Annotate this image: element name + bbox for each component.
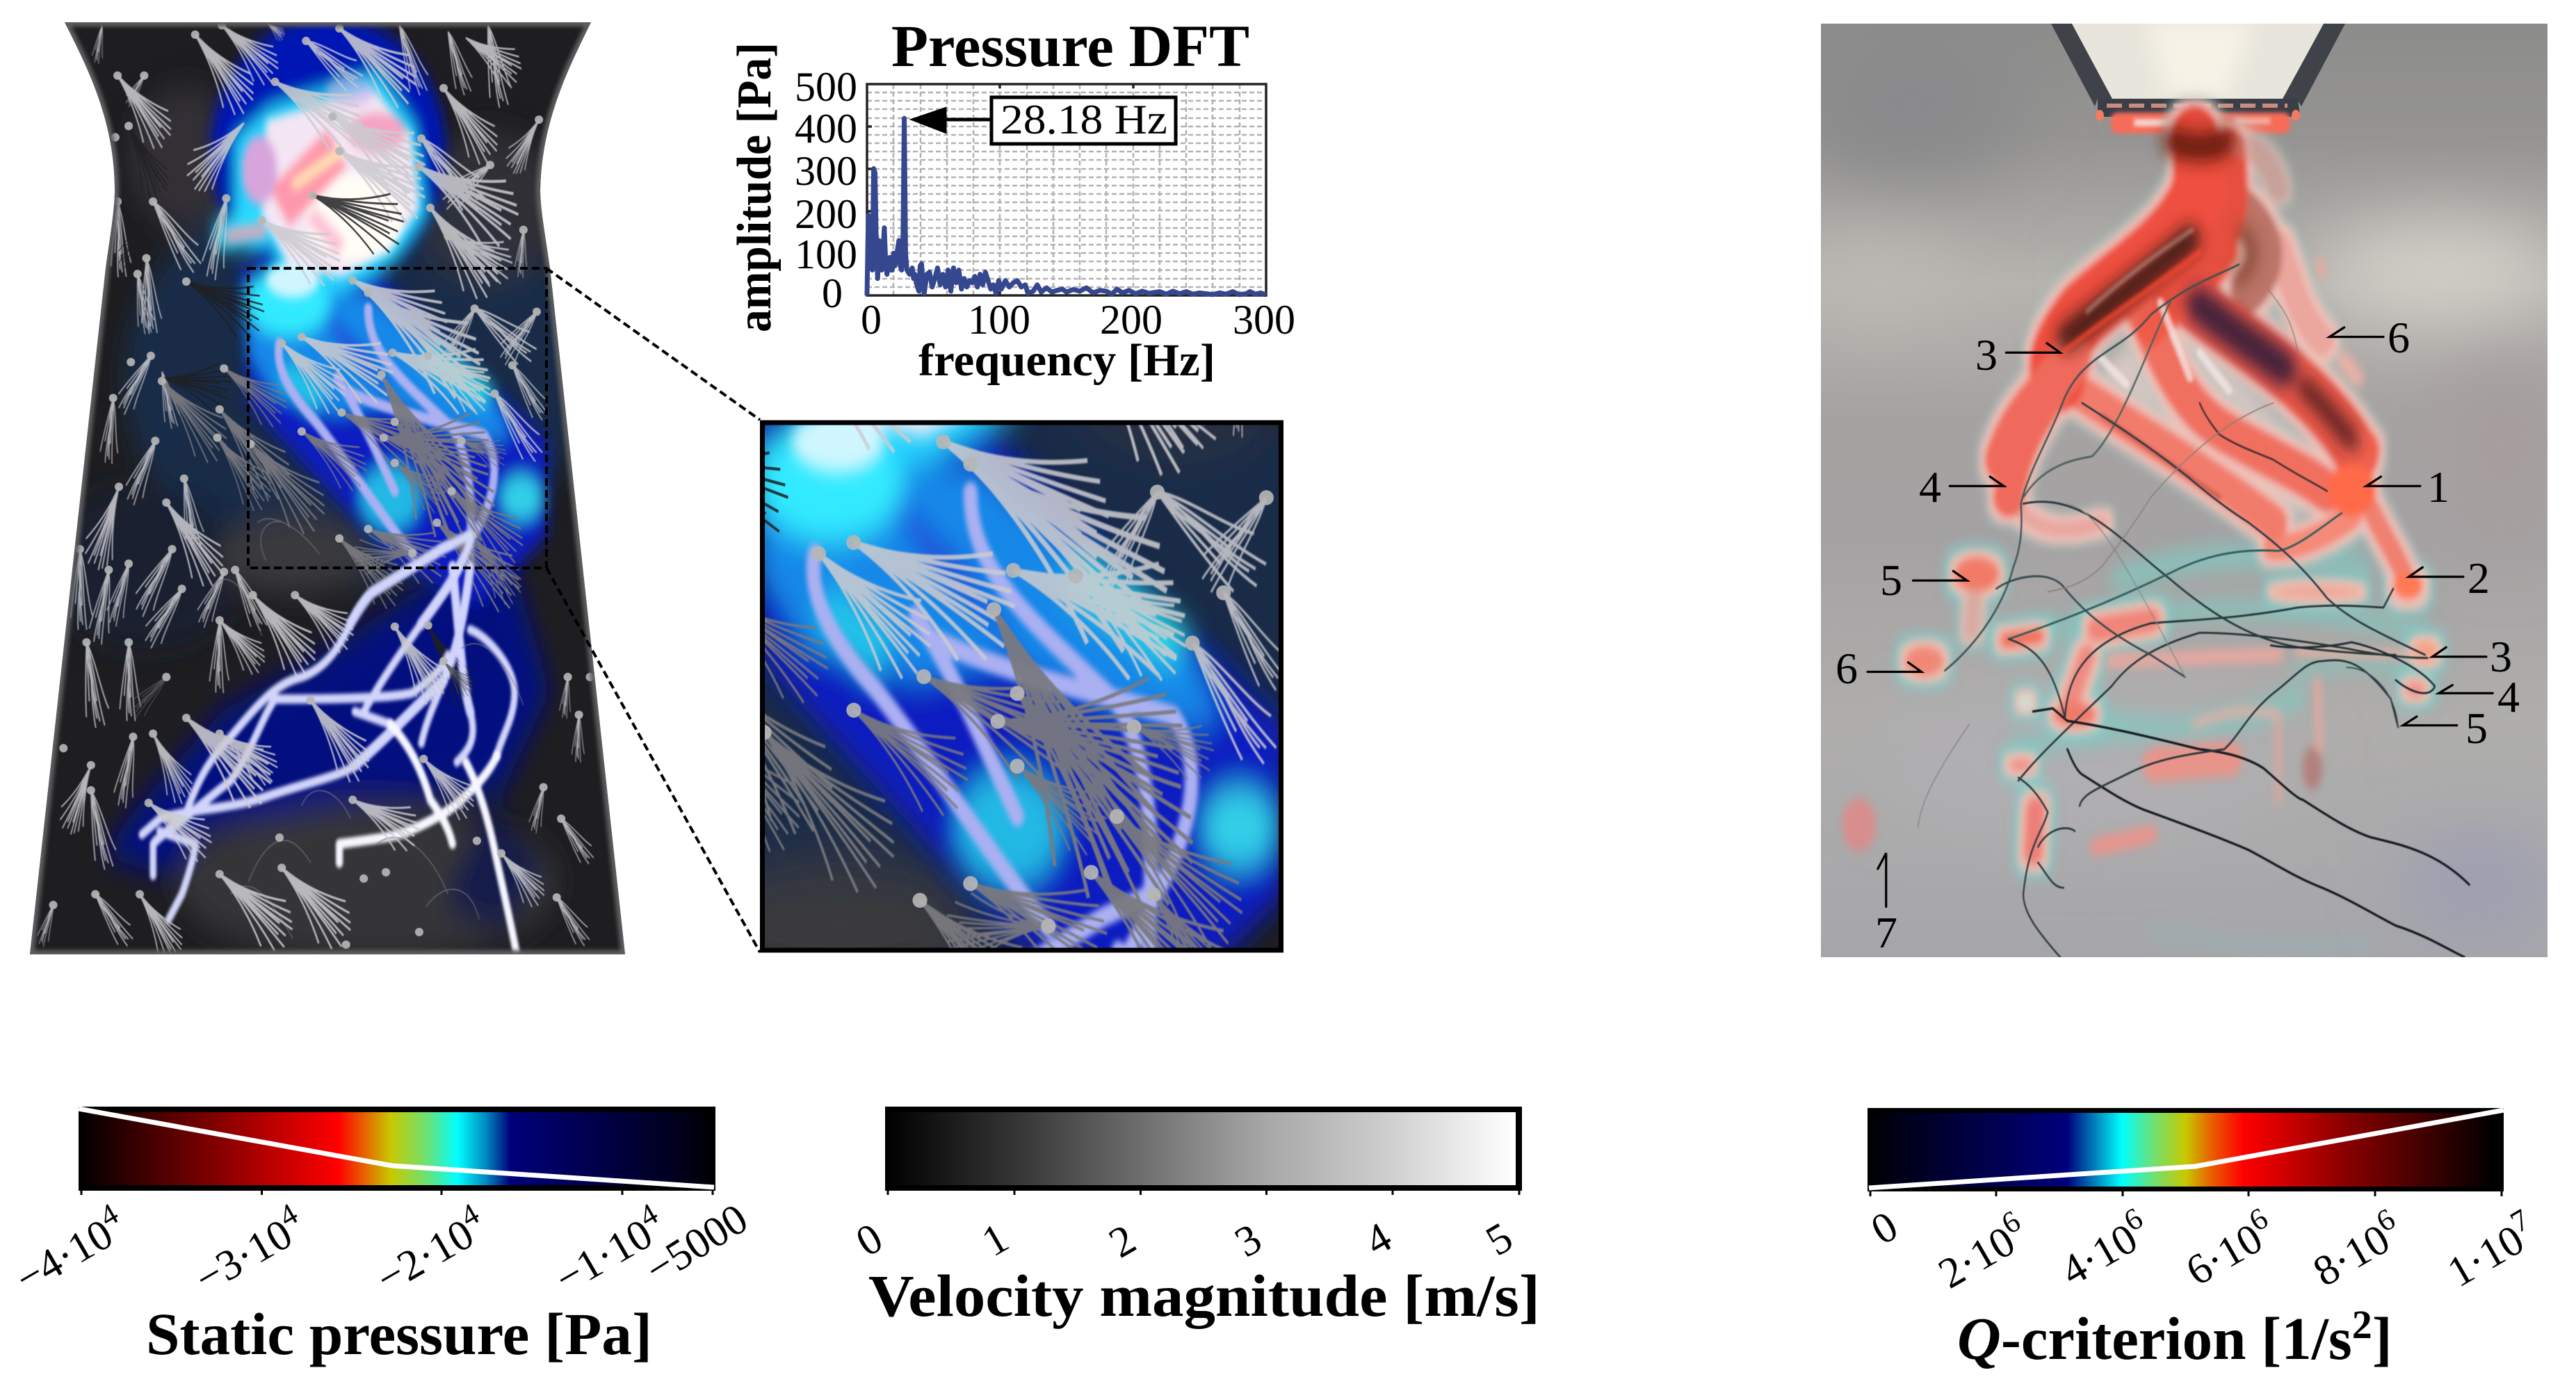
tick labels xyxy=(848,1214,1521,1267)
lower streamlines xyxy=(142,535,517,954)
y axis labels: 200 xyxy=(795,191,857,237)
tick labels: 0 xyxy=(848,1214,891,1266)
amplitude spectrum line xyxy=(867,118,1266,295)
teal haze bands xyxy=(2014,516,2435,947)
tick labels: 4 xyxy=(273,1196,303,1234)
y axis title: amplitude [Pa] xyxy=(728,42,781,332)
tick labels: 2 xyxy=(1101,1216,1144,1267)
vortex number labels: 2 xyxy=(2468,553,2490,603)
tick labels: 4 xyxy=(1357,1214,1400,1265)
plot grid xyxy=(893,84,1240,295)
upper vortex tubes xyxy=(2004,136,2422,599)
x axis labels: 0 xyxy=(861,297,882,343)
tick labels: −3·10 xyxy=(187,1210,300,1303)
streaks inside vortex tubes xyxy=(2062,230,2229,498)
dark vortex cores xyxy=(2067,142,2351,441)
colorbar: Q-criterion xyxy=(1863,1108,2545,1372)
x axis labels xyxy=(861,297,1295,343)
dashed connector to inset top xyxy=(546,268,760,420)
tick labels: 6 xyxy=(2243,1201,2274,1238)
transfer function line xyxy=(79,1109,714,1187)
lower grey and dark tufts xyxy=(129,652,476,722)
tick labels xyxy=(1863,1201,2545,1298)
y axis labels: 500 xyxy=(795,64,857,110)
panel: pressure and velocity simulation view xyxy=(28,2,627,968)
y axis labels: 0 xyxy=(822,270,843,316)
lower vortex fragments xyxy=(1905,557,2437,853)
colorbar title: Static pressure [Pa] xyxy=(146,1301,652,1367)
vortex number labels: 1 xyxy=(2427,462,2449,512)
x axis title: frequency [Hz] xyxy=(918,335,1215,386)
y axis labels: 300 xyxy=(795,148,857,194)
colorbar title: 2 xyxy=(2352,1302,2372,1347)
chart: pressure DFT xyxy=(728,13,1295,386)
tick labels: 6 xyxy=(2118,1201,2148,1238)
tick labels xyxy=(4,1195,756,1303)
y axis labels: 100 xyxy=(795,231,857,277)
vortex number labels: 7 xyxy=(1875,908,1897,957)
tick labels: 1 xyxy=(974,1214,1016,1266)
vortex number labels: 6 xyxy=(1836,644,1858,693)
vortex number labels: 4 xyxy=(1919,462,1941,512)
tick labels: 5 xyxy=(1478,1214,1521,1265)
tick labels: 4 xyxy=(633,1196,663,1234)
vortex number labels: 4 xyxy=(2497,672,2520,722)
tick labels: −4·10 xyxy=(8,1210,121,1303)
vortex number labels: 6 xyxy=(2388,313,2410,362)
tick labels: 6·10 xyxy=(2178,1214,2270,1295)
lower flow background xyxy=(102,554,559,961)
wispy faint filaments xyxy=(213,519,524,938)
dashed connector to inset bottom xyxy=(546,568,760,952)
ticks xyxy=(1870,1191,2502,1196)
lower light velocity tufts xyxy=(35,611,597,968)
vortex number labels xyxy=(1836,313,2520,957)
panel: magnified inset xyxy=(402,0,1352,1303)
tick labels: 0 xyxy=(1863,1203,1906,1254)
ticks xyxy=(81,1190,713,1195)
tick labels: 2·10 xyxy=(1931,1217,2023,1298)
vortex number labels: 5 xyxy=(1880,555,1902,605)
colorbar title: ] xyxy=(2372,1305,2392,1372)
colorbar title: Q-criterion [1/s xyxy=(1957,1305,2352,1372)
vortex number labels: 3 xyxy=(2490,632,2512,681)
tick labels: −2·10 xyxy=(368,1210,482,1303)
tick labels: 4 xyxy=(455,1196,485,1234)
tick labels: 7 xyxy=(2504,1203,2535,1239)
tick labels: 3 xyxy=(1227,1215,1270,1266)
tick labels: 6 xyxy=(1995,1204,2026,1241)
numbered arrows xyxy=(1868,327,2493,906)
ticks xyxy=(888,1190,1519,1195)
x axis labels: 100 xyxy=(968,297,1030,343)
x axis labels: 300 xyxy=(1233,297,1295,343)
tick labels: 1·10 xyxy=(2440,1216,2532,1296)
lower tuft anchor spheres xyxy=(49,621,594,949)
pale haze between tubes xyxy=(2082,302,2337,541)
peak callout: 28.18 Hz xyxy=(1001,97,1167,142)
nozzle walls xyxy=(30,22,625,954)
peak arrow xyxy=(914,109,991,131)
nozzle xyxy=(2051,24,2345,133)
y axis labels: 400 xyxy=(795,106,857,152)
chart title: Pressure DFT xyxy=(891,13,1249,79)
transfer function line xyxy=(1869,1110,2504,1188)
vortex number labels: 3 xyxy=(1975,330,1998,380)
thin vortex filaments xyxy=(1918,264,2469,957)
colorbar: static pressure xyxy=(4,1107,756,1367)
tick labels: 6 xyxy=(2370,1202,2401,1239)
vortex number labels: 5 xyxy=(2465,703,2488,753)
y axis labels xyxy=(795,64,857,316)
tick labels: 4·10 xyxy=(2053,1214,2145,1295)
tick labels: −5000 xyxy=(637,1195,756,1294)
dashed zoom region xyxy=(248,268,546,568)
tick labels: 4 xyxy=(94,1196,124,1234)
colorbar: velocity magnitude xyxy=(848,1107,1540,1329)
x axis labels: 200 xyxy=(1100,297,1163,343)
tick labels: 8·10 xyxy=(2306,1215,2397,1296)
panel: Q-criterion volume rendering xyxy=(1794,24,2566,957)
plot frame and ticks xyxy=(867,84,1266,295)
colorbar title: Velocity magnitude [m/s] xyxy=(868,1262,1540,1329)
tick labels: −1·10 xyxy=(547,1210,661,1303)
